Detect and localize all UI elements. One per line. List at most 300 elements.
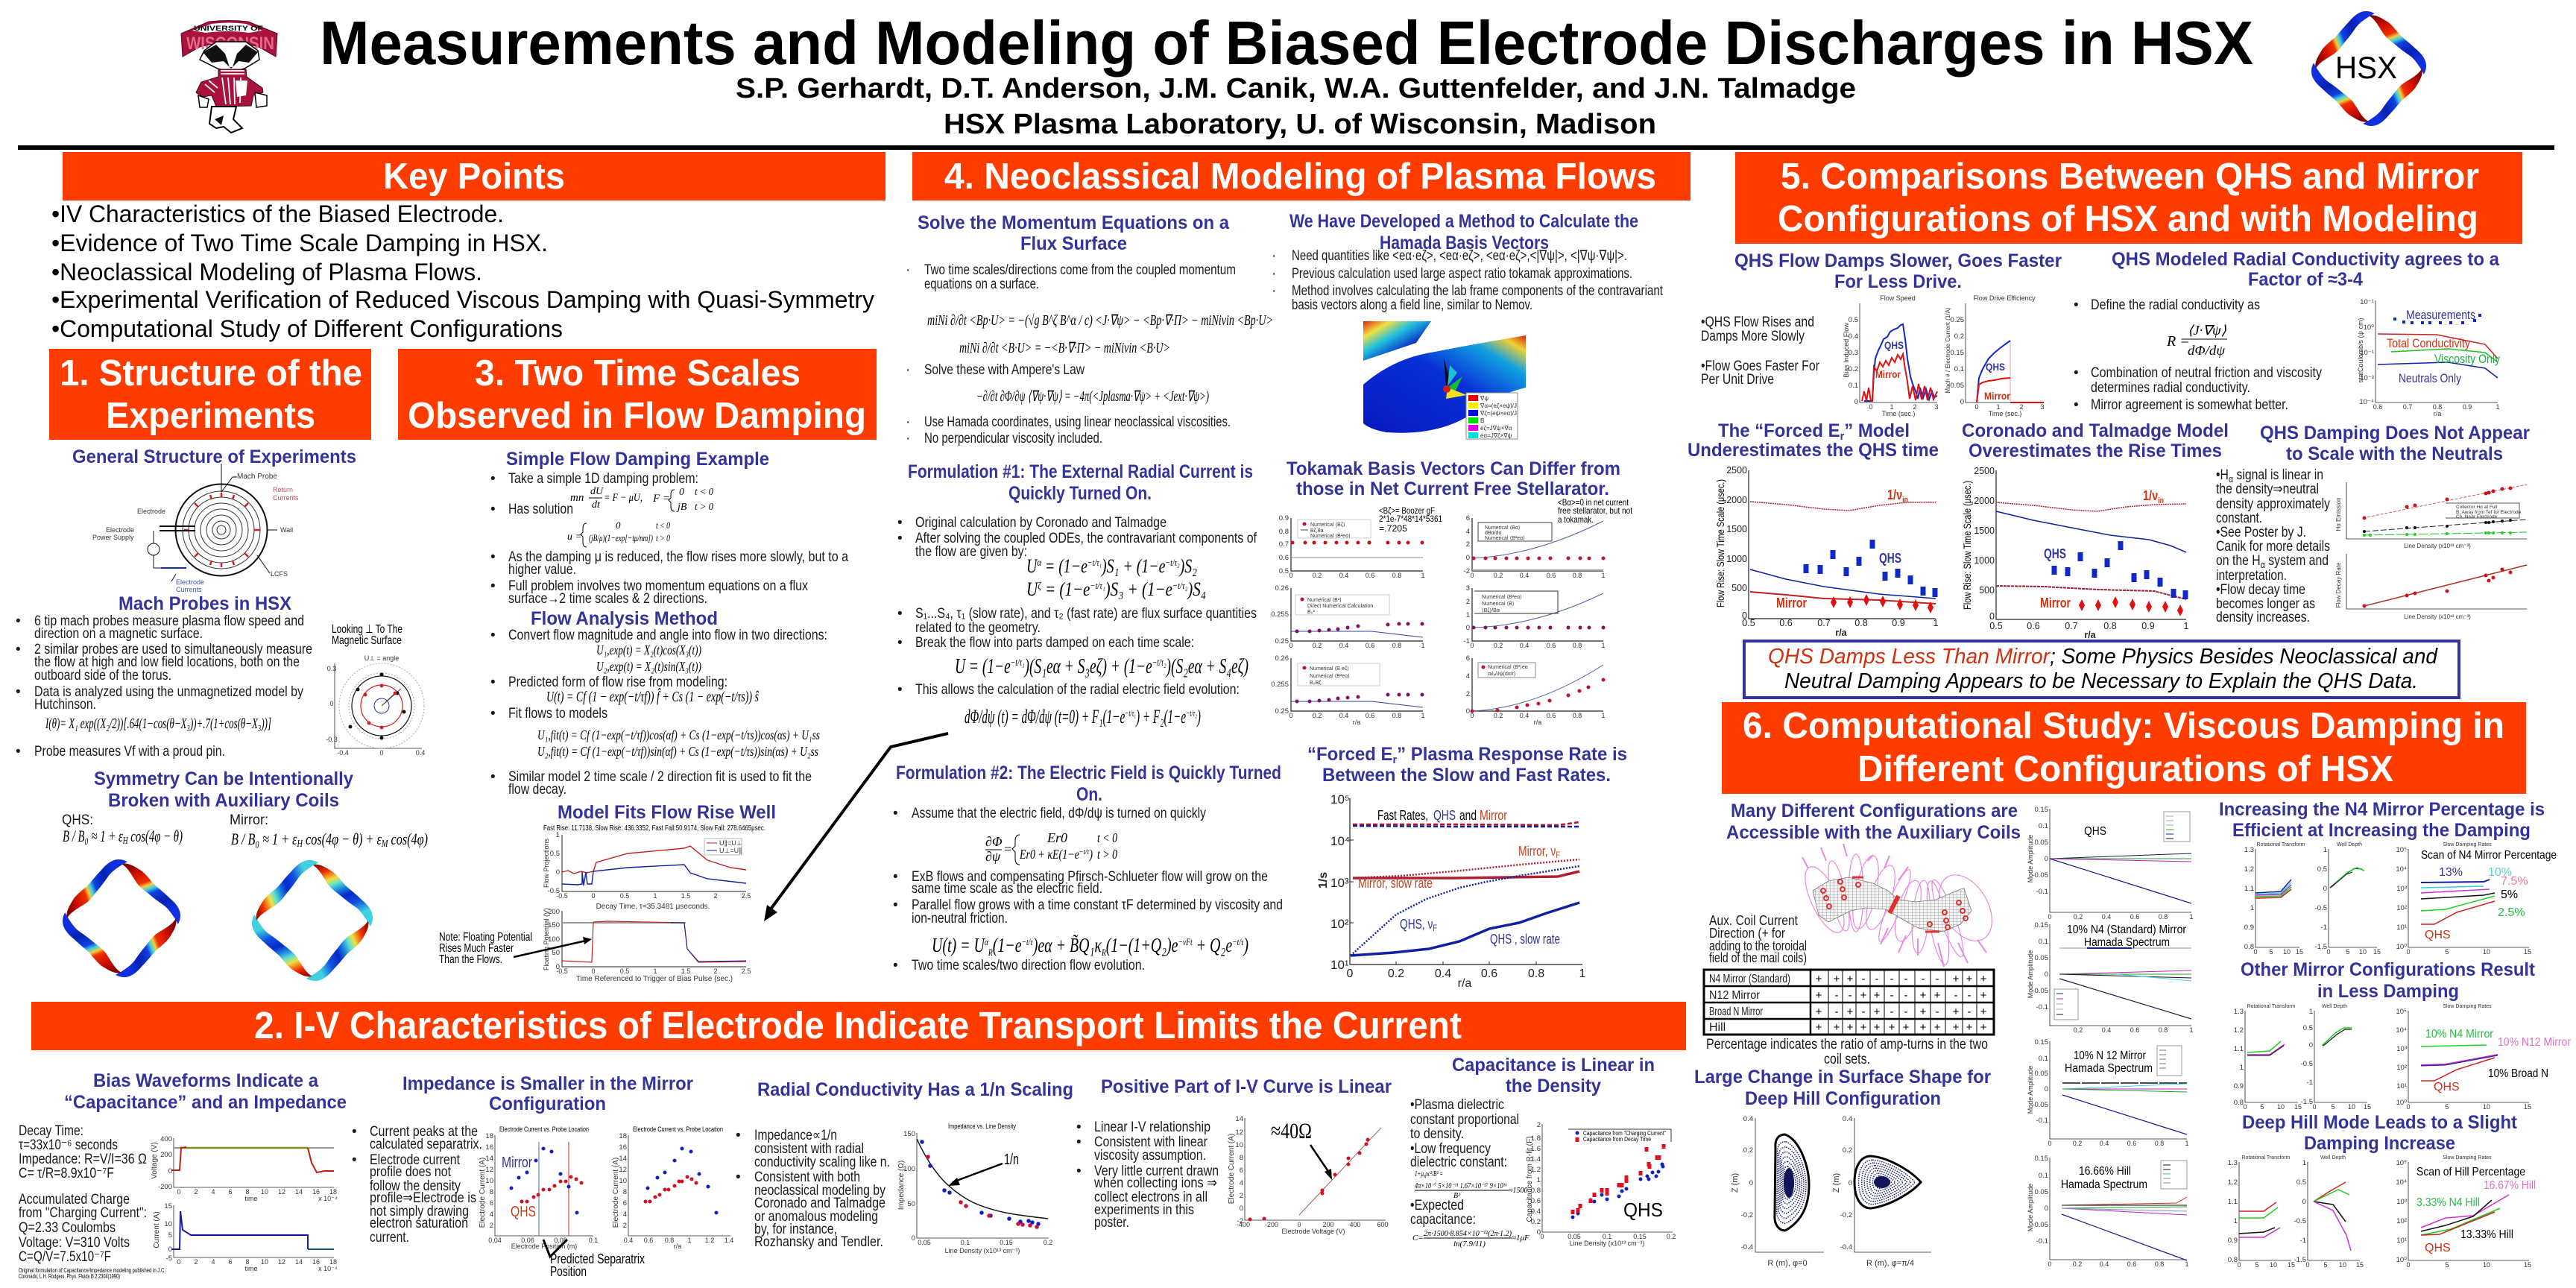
chart: flow speed: 0 — [1869, 403, 1873, 411]
chart: forced Er model vs data: 2500 — [1726, 465, 1747, 476]
chart: radial conductivity: 10⁻¹ — [2360, 298, 2374, 306]
heading: section 3: 3. Two Time Scales — [475, 353, 801, 394]
text block: formulation 2: −t/τ — [1079, 847, 1090, 856]
text block: formulation 2 — [893, 806, 1283, 973]
plot: slow damping rates: 10¹ — [2396, 924, 2407, 932]
chart: impedance vs line density: 0 — [912, 1234, 915, 1243]
chart: H-alpha vs density: B, Away from Tef for Electrode — [2456, 510, 2522, 515]
chart: current waveform: 16 — [312, 1258, 320, 1266]
subheading: QHS modeled conductivity: QHS Modeled Radial Conductivity agrees to a — [2112, 249, 2500, 270]
chart: voltage waveform — [151, 1135, 338, 1202]
table: coil configurations: + — [1847, 973, 1854, 985]
text block: momentum equations: No perpendicular viscosity included. — [924, 431, 1102, 446]
text block: radial conductivity: • — [2074, 397, 2079, 413]
chart: current waveform: 0 — [177, 1258, 181, 1266]
chart: current waveform — [153, 1202, 338, 1272]
labels and field equations: QHS: — [62, 812, 93, 828]
chart: flow speed: 0.3 — [1849, 349, 1858, 357]
plot: slow damping rates: 10¹ — [2396, 1237, 2407, 1245]
chart: flow projection fit: 2.5 — [742, 892, 751, 900]
plot: Balpha: 0 — [1466, 554, 1470, 562]
plot: B eta: ⟨Bζ⟩/Bα — [1482, 607, 1500, 613]
heading: section 6: Different Configurations of HSX — [1857, 749, 2393, 789]
chart: flow projection fit — [543, 824, 765, 911]
chart: current waveform: 12 — [278, 1258, 285, 1266]
subheading: capacitance linear: Capacitance is Linear in — [1452, 1055, 1655, 1076]
diagram: electrode and probe cross-section: Electrode — [137, 508, 165, 515]
chart: capacitance vs density: 0 — [1537, 1228, 1541, 1237]
subheading: model fits: Model Fits Flow Rise Well — [558, 802, 776, 823]
table: coil configurations: - — [1862, 1006, 1865, 1018]
key points list: •Neoclassical Modeling of Plasma Flows. — [51, 259, 482, 285]
text block: formulation 1: )S₂ — [1178, 555, 1197, 577]
plot: Balpha: 0.2 — [1494, 572, 1503, 579]
plot: well depth: 15 — [2373, 948, 2381, 956]
text block: mach probes bullets: • — [16, 744, 21, 760]
chart: H-alpha vs density — [2335, 482, 2527, 549]
plot: rotational transform: 1.2 — [2234, 1026, 2244, 1035]
plot: B zeta B: Numerical ⟨B²eα⟩ — [1310, 673, 1350, 679]
table: coil configurations: - — [1849, 989, 1852, 1002]
plot: rotational transform: 0.8 — [2244, 943, 2254, 951]
chart: electrode current vs position: 14 — [485, 1155, 493, 1163]
text block: formulation 1: S₁...S₄, τ₁ (slow rate), and τ₂ (fast rate) are flux surface quantities — [915, 606, 1257, 622]
diagram: electrode and probe cross-section: Return — [273, 486, 293, 493]
text block: formulation 2: = — [1003, 842, 1012, 856]
plot: slow damping rates: 10⁵ — [2396, 1159, 2407, 1167]
chart: Coronado Talmadge model vs data: 1000 — [1974, 555, 1995, 566]
chart: flow speed: Time (sec.) — [1882, 410, 1915, 417]
text block: formulation 1: )S₃ + (1−e — [1104, 578, 1172, 600]
plot: well depth: -1.5 — [2315, 943, 2327, 951]
plot: Balpha: 4 — [1466, 528, 1470, 536]
subheading: deep hill mode: Deep Hill Mode Leads to a Slight — [2242, 1112, 2518, 1133]
plot: Bzeta: 0.8 — [1279, 528, 1289, 536]
chart: flow speed: QHS — [1884, 339, 1904, 351]
table: coil configurations: - — [1890, 1006, 1893, 1018]
plot: B squared: Direct Numerical Calculation — [1307, 604, 1373, 609]
plot: B eta: 2 — [1466, 598, 1470, 606]
curve labels: Mirror, ν — [1518, 844, 1567, 859]
chart: impedance vs line density: Impedance vs. Line Density — [948, 1123, 1016, 1130]
chart: voltage waveform: 16 — [312, 1188, 320, 1196]
image: flux surface with basis vectors: eζ=J∇ψ×∇α — [1480, 425, 1512, 432]
text block: momentum equations: Solve these with Ampere's Law — [924, 362, 1085, 378]
plot: well depth: 1 — [2323, 846, 2327, 854]
plot: rotational transform: 0.8 — [2234, 1099, 2244, 1107]
table: coil configurations: + — [1816, 1006, 1822, 1018]
text block: mach probes bullets: 6 tip mach probes measure plasma flow speed and — [34, 613, 304, 629]
plot: slow damping rates: 13% — [2439, 866, 2463, 879]
text block: Hamada method: basis vectors along a field line, similar to Nemov. — [1292, 297, 1532, 313]
text block: current peaks: profile⇒Electrode is — [370, 1190, 476, 1206]
plot: Balpha: 0.8 — [1573, 572, 1582, 579]
chart: flow speed: 0.1 — [1849, 382, 1858, 390]
chart: Coronado Talmadge model vs data: r/a — [2084, 630, 2097, 640]
text block: simple example: • — [490, 549, 496, 565]
curve labels: F — [1433, 923, 1437, 933]
arrow: from formulation #1 to flow rise chart — [764, 733, 948, 921]
chart: impedance vs line density: 100 — [903, 1165, 915, 1173]
plot: B zeta B: 0.2 — [1313, 712, 1322, 719]
plot: well depth: -1.5 — [2301, 1098, 2313, 1106]
subheading: N4 mirror percentage: Increasing the N4 Mirror Percentage is — [2219, 799, 2545, 820]
text block: simple example: Has solution — [508, 502, 573, 517]
chart: QHS mode amplitudes: Mode Amplitude — [2027, 835, 2034, 883]
diagram: electrode and probe cross-section: Wall — [280, 526, 293, 534]
subheading: forced Er response: “Forced E — [1307, 744, 1396, 765]
chart: flow speed — [1843, 294, 1939, 417]
annotation: Balpha zero — [1558, 497, 1633, 525]
chart: floating potential: 200 — [548, 908, 560, 916]
text block: simple example: 0 — [616, 520, 621, 531]
chart: electrode current vs position: 10 — [485, 1177, 493, 1185]
table: coil configurations: - — [1954, 989, 1957, 1002]
text block: simple example: • — [490, 502, 496, 517]
chart: electrode current vs position: Electrode Current vs. Probe Location — [499, 1126, 589, 1133]
plot: B alpha B zeta: 4 — [1466, 672, 1470, 681]
chart: N4 mirror spectrum: -0.05 — [2032, 987, 2048, 995]
chart: Coronado Talmadge model vs data: Flow Rise: Slow Time Scale (μsec.) — [1961, 481, 1973, 610]
affiliation: HSX Plasma Laboratory, U. of Wisconsin, Madison — [944, 109, 1656, 140]
text block: momentum equations: Two time scales/directions come from the coupled momentum — [924, 262, 1236, 278]
plot: rotational transform — [2244, 842, 2305, 956]
subheading: forced Er response: ” Plasma Response Rate is — [1397, 744, 1627, 765]
chart: QHS mode amplitudes: 0 — [2048, 913, 2052, 921]
chart: I-V curve: Electrode Voltage (V) — [1281, 1228, 1345, 1235]
subheading: formulation 1 — [908, 461, 1253, 504]
chart: flow projection fit: 2 — [713, 892, 718, 900]
chart: voltage waveform: 18 — [329, 1188, 337, 1196]
diagram: electrode and probe cross-section — [92, 464, 299, 593]
chart: forced Er model vs data: 1 — [1933, 618, 1939, 628]
chart: Coronado Talmadge model vs data: 2500 — [1974, 466, 1995, 476]
chart: flow speed: 0.5 — [1849, 316, 1858, 324]
plot: B alpha B zeta: 0.2 — [1494, 712, 1503, 719]
text block: capacitance: •Plasma dielectric — [1410, 1097, 1504, 1113]
text block: H-alpha: on the H — [2216, 553, 2270, 569]
chart: Coronado Talmadge model vs data: 1 — [2184, 621, 2189, 631]
plot: B alpha B zeta: 0.4 — [1520, 712, 1529, 719]
text block: formulation 2: −νFt — [1178, 936, 1193, 947]
chart: probe rings: 0 — [379, 749, 384, 757]
text block: H-alpha: •Flow decay time — [2216, 582, 2305, 598]
text block: simple example: • — [490, 578, 496, 594]
plot: rotational transform: 0.9 — [2228, 1237, 2238, 1245]
chart: probe rings: 0.3 — [327, 665, 336, 672]
text block: formulation 2: t > 0 — [1097, 847, 1117, 862]
plot: rotational transform: 5 — [2269, 948, 2273, 956]
chart row: other mirror configurations — [2234, 1004, 2572, 1111]
text block: momentum equations: miNi ∂/∂t <Bp·U> = −(√g B^ζ B^α / c) <J·∇ψ> − <Bp·∇·Π> − miNiνin <Bp·U> — [927, 312, 1273, 329]
chart: flow projection fit: 0 — [591, 892, 596, 900]
subheading: QHS flow damps slower: For Less Drive. — [1834, 271, 1962, 292]
subheading: capacitance linear — [1452, 1055, 1655, 1096]
plot: well depth: 10 — [2348, 1103, 2355, 1111]
plot: slow damping rates: 15 — [2524, 948, 2531, 956]
text block: formulation 1: the flow are given by: — [915, 544, 1027, 560]
text block: decay and charge: Impedance: R=V/I=36 Ω — [19, 1152, 147, 1167]
chart: voltage waveform: Voltage (V) — [151, 1142, 159, 1179]
chart: I-V curve: 6 — [1240, 1167, 1243, 1175]
text block: radial conductivity: Combination of neutral friction and viscosity — [2091, 365, 2322, 381]
plot: rotational transform: 1.3 — [2244, 846, 2254, 854]
chart: floating potential: 50 — [552, 949, 560, 957]
y axis labels: 10⁵ — [1330, 792, 1350, 806]
text block: momentum equations: equations on a surface. — [924, 277, 1039, 292]
text block: simple example: t > 0 — [695, 502, 713, 513]
plot: well depth: 0 — [2302, 1198, 2306, 1206]
chart: voltage waveform: -200 — [158, 1183, 172, 1191]
chart: N4 mirror spectrum: 0.4 — [2102, 1026, 2111, 1034]
plot: well depth: 5 — [2346, 948, 2350, 956]
chart: capacitance vs density: 1.2 — [1531, 1166, 1541, 1174]
plot: B squared: 0.2 — [1313, 642, 1322, 649]
chart: electrode current vs position: 4 — [490, 1210, 493, 1219]
chart: flow drive efficiency: 0.1 — [1954, 365, 1964, 373]
plot: B zeta B: 0.25 — [1275, 707, 1289, 716]
subheading: other mirror configurations: in Less Damping — [2317, 981, 2459, 1002]
plot: slow damping rates: Scan of Hill Percentage — [2416, 1166, 2525, 1178]
text block: momentum equations: −∂/∂t ∂Φ/∂ψ ⟨∇ψ·∇ψ⟩ = −4π(<Jplasma·∇ψ> + <Jext·∇ψ>) — [976, 388, 1209, 405]
text block: formulation 1 — [897, 515, 1257, 727]
chart: flow decay vs density — [2335, 554, 2527, 620]
text block: simple example: surface→2 time scales & 2 directions. — [508, 591, 707, 607]
chart: capacitance vs density: 0.2 — [1531, 1218, 1541, 1226]
text block: formulation 1: )S₁ + (1−e — [1101, 555, 1165, 577]
text block: Hamada method: · — [1272, 283, 1276, 299]
text block: simple example: = F − μU, — [604, 492, 643, 504]
text block: momentum equations: · — [906, 431, 910, 446]
chart: current waveform: 0 — [168, 1246, 172, 1254]
plot: well depth: 0.5 — [2296, 1178, 2306, 1187]
chart: capacitance vs density: Capacitance from "Charging Current" — [1583, 1130, 1666, 1137]
callout: QHS damps less than mirror — [1744, 641, 2459, 698]
text block: current peaks: • — [352, 1124, 357, 1140]
text block: formulation 1: related to the geometry. — [915, 620, 1041, 636]
plot: B zeta B: 0.6 — [1366, 712, 1374, 719]
chart: impedance vs line density: 50 — [907, 1200, 915, 1208]
icon: Wisconsin badger logo — [181, 21, 277, 133]
text block: formulation 1: This allows the calculation of the radial electric field evolution: — [915, 682, 1240, 698]
chart: floating potential: 0.5 — [620, 967, 629, 975]
plot: B eta — [1464, 584, 1606, 649]
text block: H-alpha: •See Poster by J. — [2216, 525, 2306, 540]
chart: forced Er model vs data: 0.6 — [1779, 618, 1793, 628]
plot: Bzeta: 1 — [1421, 572, 1425, 579]
text block: simple example: t > 0 — [656, 532, 670, 543]
chart: electrode current vs r/a: 1.2 — [705, 1237, 714, 1244]
chart: QHS mode amplitudes: -0.05 — [2032, 871, 2048, 880]
chart: electrode current vs r/a: 2 — [623, 1222, 627, 1230]
chart: flow projection fit: 1 — [653, 892, 657, 900]
chart: electrode current vs position — [479, 1126, 598, 1250]
subheading: momentum equations: Solve the Momentum Equations on a — [918, 212, 1230, 233]
chart: electrode current vs r/a: 18 — [619, 1132, 627, 1140]
text block: formulation 1: U — [1026, 555, 1041, 577]
chart: voltage waveform: 6 — [228, 1188, 233, 1196]
plot: Balpha: Numerical ⟨B²eα⟩ — [1485, 535, 1525, 541]
chart: flow speed: 2 — [1913, 403, 1917, 411]
text block: aux coil direction: Aux. Coil Current — [1709, 913, 1798, 928]
plot: well depth: 15 — [2364, 1103, 2371, 1111]
chart: flow drive efficiency: 0.25 — [1950, 316, 1964, 324]
chart: N12 mirror spectrum: 0.6 — [2127, 1140, 2136, 1147]
plot: Balpha: 0.6 — [1547, 572, 1556, 579]
text block: mach probes bullets: Probe measures Vf with a proud pin. — [34, 744, 225, 760]
text block: Hamada method: Method involves calculating the lab frame components of the contravariant — [1292, 283, 1664, 299]
text block: H-alpha — [2216, 467, 2330, 625]
text block: H-alpha: •H — [2216, 467, 2231, 483]
icon: HSX logo — [2311, 11, 2426, 126]
plot: B zeta B: 0 — [1289, 712, 1293, 719]
chart: electrode current vs r/a — [612, 1126, 733, 1250]
callout: QHS damps less than mirror: QHS Damps Less Than Mirror — [1768, 645, 2051, 669]
chart: Coronado Talmadge model vs data — [1961, 466, 2189, 640]
text block: formulation 1: −t/τ₁ — [1090, 580, 1105, 591]
plot: slow damping rates: 10³ — [2396, 1198, 2407, 1206]
text block: formulation 2: )eα + B̃Q₁κ — [1032, 934, 1102, 956]
text block: formulation 2: + Q₂e — [1193, 934, 1232, 956]
text block: simple example: 0 — [679, 487, 684, 498]
text block: capacitance: •Expected — [1410, 1198, 1464, 1213]
table: coil configurations: + — [1847, 1021, 1854, 1034]
chart: flow projection fit: 0.5 — [550, 850, 560, 858]
text block: capacitance: 4π×10⁻⁷ 5×10⁻¹¹ 1.67×10⁻²⁷ 9×10¹⁶ — [1415, 1182, 1507, 1190]
chart: current waveform: 10 — [261, 1258, 268, 1266]
chart: radial conductivity: 0.9 — [2463, 403, 2472, 411]
text block: formulation 2: • — [893, 897, 898, 913]
y axis labels: 10² — [1330, 917, 1349, 931]
chart: H-alpha vs density: Ch, Near Electrode — [2456, 514, 2498, 520]
text block: capacitance: •Low frequency — [1410, 1141, 1491, 1157]
text block: simple example: F = — [652, 493, 670, 505]
plot: rotational transform: 15 — [2288, 1261, 2295, 1269]
plot: rotational transform: Rotational Transform — [2242, 1155, 2291, 1161]
plot: well depth: 0 — [2305, 1261, 2310, 1269]
chart: I-V curve: 0 — [1240, 1205, 1243, 1213]
text block: simple example — [490, 471, 848, 607]
chart: radial conductivity: 0.7 — [2403, 403, 2412, 411]
text block: decay and charge: C=Q/V=7.5x10⁻⁷F — [19, 1249, 111, 1265]
chart: flow drive efficiency: Mach # / Electrode Current (1/A) — [1945, 307, 1951, 394]
text block: percentage note — [1706, 1037, 1988, 1067]
chart: current waveform: x 10⁻⁴ — [318, 1265, 338, 1272]
chart: Poincare plot phi 0: 0.4 — [1743, 1115, 1753, 1123]
subheading: simple flow damping: Simple Flow Damping Example — [506, 449, 769, 470]
text block: decay and charge: Decay Time: — [19, 1123, 83, 1139]
plot: B alpha B zeta: Numerical ⟨B²⟩eα — [1488, 664, 1528, 670]
plot: B eta: 0 — [1466, 624, 1470, 632]
subheading: formulation 2: On. — [1076, 784, 1102, 805]
text block: radial conductivity: Define the radial conductivity as — [2091, 297, 2260, 313]
plot: rotational transform: 10 — [2277, 1103, 2285, 1111]
text block: formulation 2: ∂ψ — [985, 849, 1001, 864]
annotation: Bzeta Boozer: <Bζ>= Boozer gF — [1379, 505, 1435, 516]
chart: I-V curve: -200 — [1265, 1221, 1278, 1228]
chart: Poincare plot phi pi/4: 0 — [1849, 1179, 1852, 1187]
key points list — [51, 201, 874, 342]
plot: slow damping rates: 0 — [2406, 948, 2411, 956]
text block: formulation 1: −t/τ₁ — [1125, 707, 1136, 719]
text block: impedance scaling: Coronado and Talmadge — [754, 1196, 886, 1211]
chart: Hill spectrum: 0.15 — [2035, 1155, 2048, 1163]
text block: formulation 2: same time scale as the electric field. — [912, 881, 1102, 897]
heading: section 3: Observed in Flow Damping — [408, 396, 866, 436]
x axis labels: 0.4 — [1435, 967, 1451, 980]
chart: N4 mirror spectrum: Hamada Spectrum — [2084, 936, 2170, 949]
chart: Poincare plot phi 0: 0 — [1749, 1179, 1753, 1187]
subheading: Hamada basis vectors: Hamada Basis Vectors — [1380, 233, 1549, 253]
chart: Hill spectrum: 0.05 — [2035, 1188, 2048, 1196]
chart: Hill spectrum: -0.1 — [2036, 1237, 2048, 1246]
subheading: QHS damping neutrals: QHS Damping Does Not Appear — [2260, 423, 2530, 443]
text block: formulation 2: R — [1101, 947, 1106, 958]
chart: N12 mirror spectrum: 0 — [2045, 1085, 2048, 1093]
text block: impedance scaling: neoclassical modeling by — [754, 1183, 886, 1199]
diagram: electrode and probe cross-section: Mach Probe — [237, 473, 277, 481]
text block: linear I-V: Linear I-V relationship — [1094, 1120, 1210, 1135]
plot: slow damping rates: 13.33% Hill — [2460, 1228, 2513, 1241]
plot: Bzeta: Numerical ⟨Bζ⟩ — [1310, 522, 1345, 528]
chart: flow projection fit: Decay Time, τ=35.3481 μseconds. — [596, 903, 710, 911]
chart: flow drive efficiency: QHS — [1986, 361, 2005, 373]
chart: QHS mode amplitudes: 1 — [2189, 913, 2194, 921]
chart: QHS mode amplitudes: -0.1 — [2036, 888, 2048, 896]
table: coil configurations: - — [1890, 973, 1893, 985]
table: coil configurations: Broad N Mirror — [1709, 1006, 1763, 1018]
plot: B eta: 0.6 — [1547, 642, 1556, 649]
chart: electrode current vs r/a: 1.4 — [724, 1237, 733, 1244]
plot: rotational transform: 1.3 — [2228, 1159, 2238, 1167]
plot: well depth: 0.5 — [2303, 1024, 2313, 1032]
text block: radial conductivity: ⟨J·∇ψ⟩ — [2188, 323, 2226, 338]
plot: well depth: 0 — [2323, 885, 2327, 893]
text block: formulation 2: ) — [1243, 934, 1248, 956]
chart: electrode current vs position: 0.08 — [554, 1237, 567, 1244]
chart: capacitance vs density — [1526, 1121, 1676, 1247]
text block: formulation 1: )S₄ — [1187, 578, 1206, 600]
plot: B zeta B: 1 — [1421, 712, 1425, 719]
plot: slow damping rates: 10² — [2396, 1064, 2407, 1072]
chart: forced Er model vs data: 0.9 — [1892, 618, 1905, 628]
chart: electrode current vs r/a: 6 — [623, 1199, 627, 1208]
plot: B eta: 1 — [1466, 611, 1470, 619]
chart: floating potential: 1.5 — [681, 967, 690, 975]
text block: simple example: • — [490, 471, 496, 487]
text block: linear I-V: when collecting ions ⇒ — [1093, 1175, 1217, 1191]
text block: mach probes bullets: direction on a magnetic surface. — [34, 626, 203, 642]
chart: I-V curve: 8 — [1240, 1154, 1243, 1162]
text block: formulation 1: )(S₁eα + S₃eζ) + (1−e — [1023, 655, 1152, 678]
text block: decay and charge: Accumulated Charge — [19, 1192, 130, 1208]
chart: I-V curve: Electrode Current (A) — [1228, 1134, 1236, 1204]
chart: electrode current vs position: 6 — [490, 1199, 493, 1208]
chart: flow drive efficiency: 0 — [1960, 398, 1964, 406]
subheading: impedance smaller: Impedance is Smaller in the Mirror — [402, 1073, 693, 1094]
key points list: •Evidence of Two Time Scale Damping in HSX. — [51, 230, 548, 256]
text block: percentage note: Percentage indicates the ratio of amp-turns in the two — [1706, 1037, 1988, 1052]
plot: well depth — [2315, 842, 2381, 956]
chart: impedance vs line density: 0.05 — [918, 1239, 931, 1246]
image: HSX coils and surface — [1797, 844, 2003, 967]
text block: mach probes bullets: • — [16, 642, 21, 657]
plot: slow damping rates: 10 — [2483, 1103, 2490, 1111]
chart: Coronado Talmadge model vs data: 500 — [1979, 585, 1995, 596]
chart: N4 mirror spectrum — [2027, 921, 2194, 1034]
plot: rotational transform — [2234, 1004, 2302, 1111]
subheading: forced Er model: Underestimates the QHS time — [1688, 440, 1939, 461]
